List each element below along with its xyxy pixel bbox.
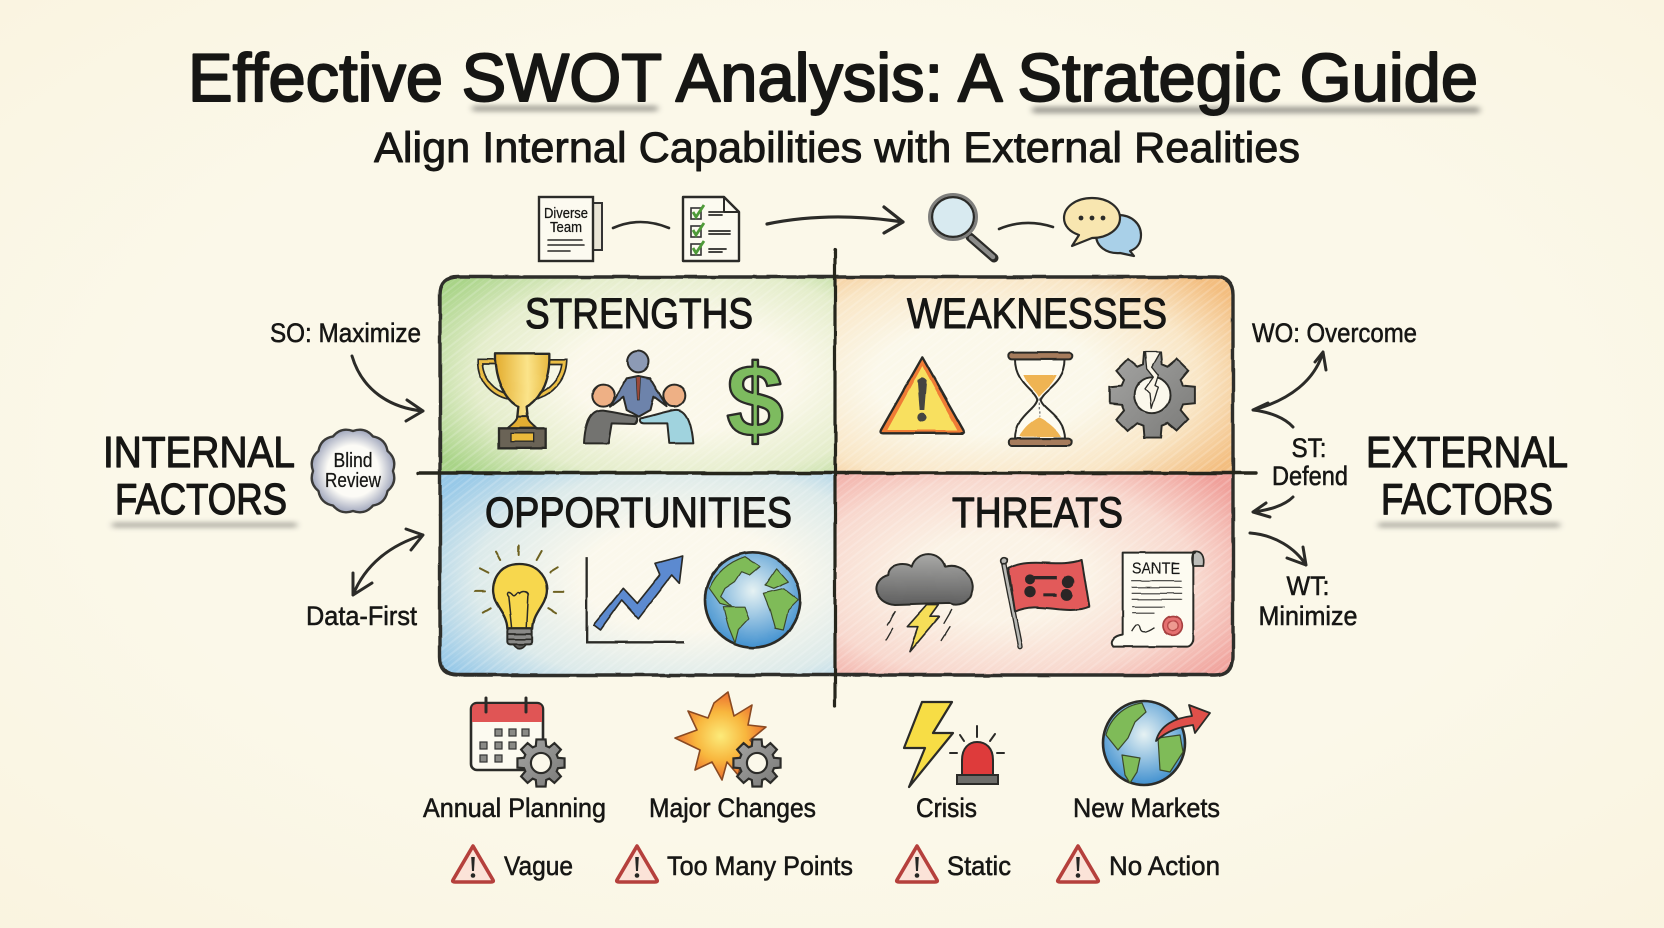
icon: warning — [897, 846, 937, 882]
arrow: WT — [1250, 533, 1306, 565]
icon: warning — [1058, 846, 1098, 882]
icon: lightning and siren — [904, 702, 1004, 787]
arrow: SO — [352, 356, 423, 421]
icon: speech bubbles — [1064, 198, 1141, 256]
pitfall: vague — [453, 846, 573, 882]
subtitle: Align Internal Capabilities with External Realities — [374, 124, 1300, 172]
strategy label: WT minimize: WT: — [1286, 571, 1330, 601]
icon: growth chart — [587, 556, 684, 642]
panel: strengths — [440, 277, 835, 473]
external factors label: FACTORS — [1381, 475, 1553, 524]
internal factors label: FACTORS — [115, 475, 287, 524]
matrix frame and axes — [418, 250, 1256, 706]
icon: hourglass — [1008, 353, 1072, 446]
arrow: long process arrow — [767, 207, 903, 233]
icon: red flag — [1001, 558, 1089, 647]
icon: warning — [617, 846, 657, 882]
icon: checklist — [683, 197, 739, 261]
icon: diverse team document: Diverse — [544, 206, 588, 222]
connector — [613, 222, 669, 228]
badge: blind review — [312, 430, 394, 512]
arrow: ST — [1253, 497, 1293, 517]
badge: blind review: Review — [325, 470, 381, 492]
heading: opportunities: OPPORTUNITIES — [485, 489, 792, 537]
strategy label: WT minimize — [1258, 571, 1358, 631]
label: Static — [947, 851, 1011, 881]
icon: burst with gear — [675, 692, 781, 787]
label: Too Many Points — [667, 851, 853, 881]
strategy label: WO overcome: WO: Overcome — [1252, 318, 1417, 348]
icon: broken gear — [1110, 352, 1195, 438]
external factors label — [1366, 428, 1568, 527]
strategy label: WT minimize: Minimize — [1258, 601, 1358, 631]
icon: calendar with gear — [471, 698, 565, 787]
icon: legal document — [1112, 551, 1204, 647]
icon: globe — [705, 552, 800, 648]
icon: handshake team — [584, 351, 693, 443]
icon: globe with arrow — [1103, 701, 1210, 785]
internal factors label — [103, 428, 297, 527]
pitfall: too many points — [617, 846, 853, 882]
strategy label: ST defend: ST: — [1292, 433, 1326, 463]
when to use: major changes — [649, 692, 816, 823]
strategy label: ST defend — [1272, 433, 1348, 491]
connector — [999, 223, 1053, 229]
heading: strengths: STRENGTHS — [525, 290, 753, 338]
icon: storm cloud — [876, 554, 973, 652]
strategy label: SO maximize: SO: Maximize — [270, 318, 421, 348]
strategy label: ST defend: Defend — [1272, 461, 1348, 491]
heading: threats: THREATS — [952, 489, 1123, 537]
icon: dollar sign: $ — [726, 343, 784, 459]
heading: weaknesses: WEAKNESSES — [907, 290, 1167, 338]
pitfall: no action — [1058, 846, 1220, 882]
top process row — [539, 194, 1141, 261]
icon: warning — [453, 846, 493, 882]
icon: legal document: SANTE — [1132, 560, 1180, 577]
label: No Action — [1109, 851, 1220, 881]
arrow: WO — [1253, 352, 1326, 427]
internal factors label: INTERNAL — [103, 428, 295, 477]
icon: diverse team document: Team — [550, 220, 582, 236]
icon: light bulb — [474, 546, 563, 649]
pitfall: static — [897, 846, 1011, 882]
panel: threats — [835, 473, 1233, 675]
panel: weaknesses — [835, 277, 1233, 473]
icon: warning triangle — [881, 357, 964, 433]
label: Annual Planning — [423, 793, 606, 823]
label: Crisis — [916, 793, 977, 823]
when to use: new markets — [1073, 701, 1220, 823]
when to use: annual planning — [423, 698, 606, 823]
icon: trophy — [480, 353, 564, 448]
label: Vague — [504, 851, 573, 881]
badge: blind review: Blind — [334, 450, 372, 472]
title: Effective SWOT Analysis: A Strategic Guide — [188, 40, 1478, 116]
arrow: data-first — [353, 529, 423, 595]
SWOT quadrant matrix — [418, 250, 1256, 706]
label: New Markets — [1073, 793, 1220, 823]
icon: magnifying glass — [930, 194, 994, 258]
when to use: crisis — [904, 702, 1004, 823]
panel: opportunities — [440, 473, 835, 675]
strategy label: data-first: Data-First — [306, 601, 417, 631]
label: Major Changes — [649, 793, 816, 823]
icon: diverse team document — [539, 197, 602, 261]
external factors label: EXTERNAL — [1366, 428, 1568, 477]
